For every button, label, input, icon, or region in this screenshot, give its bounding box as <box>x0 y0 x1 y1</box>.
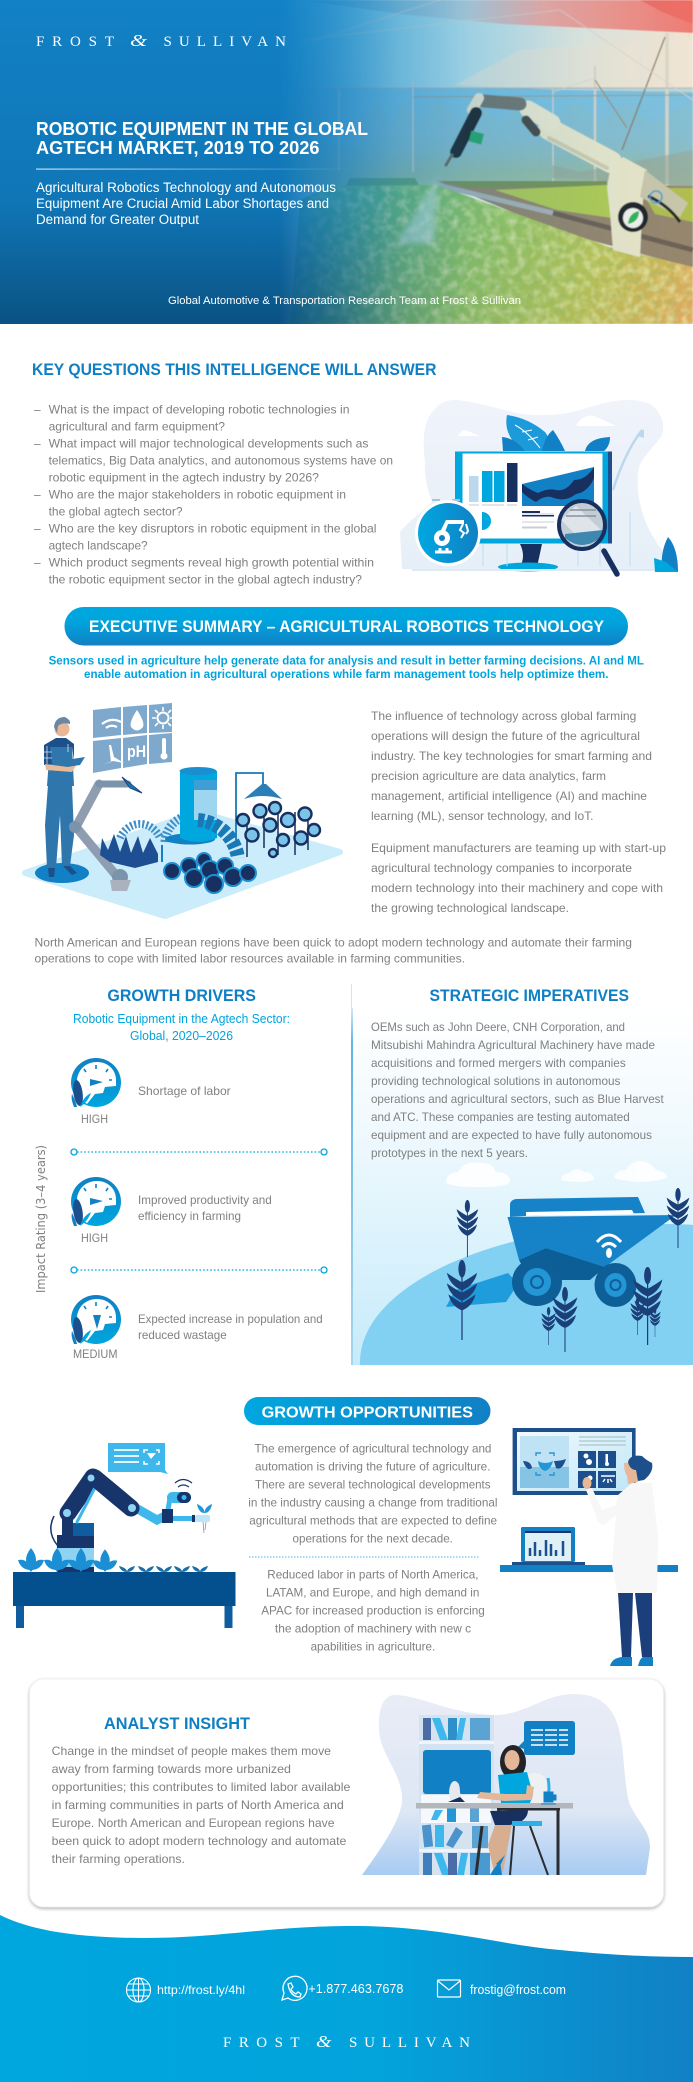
footer contact details <box>126 1976 566 2002</box>
driver: population and wastage: MEDIUM <box>73 1347 118 1361</box>
growth drivers subtitle: Global, 2020–2026 <box>130 1029 233 1043</box>
strategic imperatives body text: prototypes in the next 5 years. <box>371 1146 528 1160</box>
executive summary body text <box>371 709 666 915</box>
analyst insight body text: Change in the mindset of people makes them move <box>52 1744 331 1758</box>
regional adoption note: North American and European regions have been quick to adopt modern technology and automate their farming <box>34 936 632 950</box>
email <box>438 1980 566 1997</box>
question list <box>34 402 393 586</box>
hero banner <box>0 0 693 324</box>
Frost & Sullivan logo: FROST <box>36 34 114 50</box>
strategic imperatives body text: and ATC. These companies are testing automated <box>371 1110 630 1124</box>
farmer <box>35 717 89 883</box>
executive summary lead text: Sensors used in agriculture help generate data for analysis and result in better farming decisions. AI and ML <box>49 653 644 667</box>
opportunity paragraph two: apabilities in agriculture. <box>311 1640 435 1654</box>
harvester <box>446 1197 676 1307</box>
growth drivers subtitle <box>73 1012 290 1043</box>
question list: Who are the key disruptors in robotic equipment in the global <box>49 521 377 535</box>
growth drivers heading: GROWTH DRIVERS <box>107 987 256 1005</box>
driver: population and wastage <box>71 1295 323 1361</box>
opportunity paragraph two: Reduced labor in parts of North America, <box>267 1568 478 1582</box>
subtitle: Demand for Greater Output <box>36 212 199 227</box>
Frost & Sullivan logo: SULLIVAN <box>164 34 286 50</box>
panel: strategic imperatives <box>351 984 693 1365</box>
question list: telematics, Big Data analytics, and autonomous systems have on <box>49 453 393 467</box>
driver: shortage of labor: Shortage of labor <box>138 1084 231 1098</box>
opportunity paragraph one: agricultural methods that are expected to define <box>249 1514 497 1528</box>
sensor panels <box>93 703 174 773</box>
driver: improved productivity: HIGH <box>81 1231 108 1245</box>
footer Frost & Sullivan logo: FROST <box>223 2035 300 2051</box>
cabbages <box>164 853 256 893</box>
panel: growth opportunities <box>13 1397 678 1666</box>
executive summary body text: agricultural technology companies to incorporate <box>371 861 632 875</box>
executive summary body text: precision agriculture are data analytics, farm <box>371 769 606 783</box>
question list: robotic equipment in the agtech industry by 2026? <box>49 470 319 484</box>
opportunity paragraph one: operations for the next decade. <box>292 1532 453 1546</box>
executive summary body text: management, artificial intelligence (AI) and machine <box>371 789 647 803</box>
opportunity paragraph one <box>248 1442 498 1546</box>
opportunity paragraph two: LATAM, and Europe, and high demand in <box>266 1586 479 1600</box>
question list: the robotic equipment sector in the global agtech industry? <box>49 572 362 586</box>
analyst insight body text: Europe. North American and European regions have <box>52 1816 335 1830</box>
footer wave <box>0 1915 693 2082</box>
title <box>36 122 368 157</box>
illustration: robot arm tending plants on a table <box>13 1443 236 1628</box>
strategic imperatives body text <box>371 1020 664 1160</box>
footer Frost & Sullivan logo: & <box>316 2032 332 2051</box>
driver: improved productivity: Improved productivity and <box>138 1193 272 1207</box>
divider <box>71 1267 327 1273</box>
analyst insight heading: ANALYST INSIGHT <box>104 1715 250 1733</box>
subtitle <box>36 180 336 227</box>
opportunity paragraph one: The emergence of agricultural technology and <box>254 1442 491 1456</box>
illustration: autonomous harvester among wheat <box>360 1161 693 1365</box>
driver: population and wastage: reduced wastage <box>138 1328 227 1342</box>
hero blue overlay <box>0 0 693 324</box>
analyst insight body text: been quick to adopt modern technology and automate <box>52 1834 347 1848</box>
executive summary body text: the growing technological landscape. <box>371 901 569 915</box>
executive summary body text: operations will design the future of the agricultural <box>371 729 640 743</box>
driver: improved productivity: efficiency in farming <box>138 1209 241 1223</box>
question list: Which product segments reveal high growth potential within <box>49 555 374 569</box>
crop rows and sprinkler arcs <box>100 815 205 868</box>
question list: What impact will major technological developments such as <box>49 436 368 450</box>
phone: +1.877.463.7678 <box>308 1982 403 1996</box>
strategic imperatives body text: acquisitions and formed mergers with companies <box>371 1056 626 1070</box>
question list: agtech landscape? <box>49 538 148 552</box>
flowering plants <box>237 802 320 857</box>
executive summary body text: industry. The key technologies for smart farming and <box>371 749 652 763</box>
question list: – <box>34 402 41 416</box>
executive summary body text: The influence of technology across global farming <box>371 709 636 723</box>
executive summary banner <box>64 607 628 646</box>
footer Frost & Sullivan logo: SULLIVAN <box>349 2035 470 2051</box>
illustration: dashboard monitor with robot and magnifier <box>400 400 678 574</box>
opportunity paragraph one: There are several technological developments <box>255 1478 490 1492</box>
strategic imperatives body text: Mitsubishi Mahindra Agricultural Machinery have made <box>371 1038 655 1052</box>
question list: agricultural and farm equipment? <box>49 419 225 433</box>
hill <box>360 1224 693 1365</box>
computer monitor <box>423 1750 491 1794</box>
farm platform <box>25 812 340 916</box>
sensor panels: pH <box>127 742 146 761</box>
driver: shortage of labor: HIGH <box>81 1112 108 1126</box>
mug <box>541 1792 556 1804</box>
email: frostig@frost.com <box>470 1983 566 1997</box>
question list: Who are the major stakeholders in robotic equipment in <box>49 487 346 501</box>
analyst insight body text: opportunities; this contributes to limited labor available <box>52 1780 351 1794</box>
growth drivers subtitle: Robotic Equipment in the Agtech Sector: <box>73 1012 290 1026</box>
desk and laptop <box>500 1565 678 1572</box>
impact rating axis label: Impact Rating (3–4 years) <box>33 1145 48 1293</box>
illustration: analyst at desk with headset <box>362 1694 650 1875</box>
speech bubble <box>518 1721 575 1755</box>
analyst insight body text: in farming communities in parts of North America and <box>52 1798 344 1812</box>
executive summary banner: EXECUTIVE SUMMARY – AGRICULTURAL ROBOTICS TECHNOLOGY <box>89 617 605 636</box>
regional adoption note: operations to cope with limited labor resources available in farming communities. <box>34 952 465 966</box>
strategic imperatives body text: equipment and are expected to have fully autonomous <box>371 1128 652 1142</box>
potted plants <box>18 1548 117 1572</box>
question list: – <box>34 555 41 569</box>
leaves behind monitor <box>506 415 548 451</box>
title: AGTECH MARKET, 2019 TO 2026 <box>36 137 320 158</box>
analyst insight body text <box>52 1744 351 1866</box>
bookshelf <box>419 1715 494 1875</box>
question list: – <box>34 521 41 535</box>
opportunity paragraph two: APAC for increased production is enforcing <box>261 1604 485 1618</box>
strategic imperatives heading: STRATEGIC IMPERATIVES <box>430 987 629 1005</box>
question list: – <box>34 436 41 450</box>
opportunity paragraph two: the adoption of machinery with new c <box>275 1622 471 1636</box>
key questions heading: KEY QUESTIONS THIS INTELLIGENCE WILL ANSWER <box>32 361 437 379</box>
analyst <box>477 1745 549 1875</box>
water tank <box>165 767 238 858</box>
question list: the global agtech sector? <box>49 504 183 518</box>
shower sprayer <box>236 773 282 842</box>
executive summary body text: learning (ML), sensor technology, and IoT. <box>371 809 594 823</box>
divider <box>71 1149 327 1155</box>
question list: What is the impact of developing robotic technologies in <box>49 402 349 416</box>
robot arm <box>69 777 142 891</box>
subtitle: Equipment Are Crucial Amid Labor Shortages and <box>36 196 329 211</box>
driver: improved productivity <box>71 1177 272 1245</box>
phone <box>282 1976 403 2000</box>
question list: – <box>34 487 41 501</box>
subtitle: Agricultural Robotics Technology and Autonomous <box>36 180 336 195</box>
clouds <box>446 1161 667 1187</box>
wheat plants <box>447 1188 689 1352</box>
panel: growth drivers <box>33 987 327 1361</box>
strategic imperatives body text: OEMs such as John Deere, CNH Corporation, and <box>371 1020 625 1034</box>
growth opportunities banner: GROWTH OPPORTUNITIES <box>262 1405 473 1422</box>
panel: analyst insight <box>30 1679 664 1907</box>
illustration: scientist at monitoring screen <box>500 1428 678 1666</box>
opportunity paragraph two <box>261 1568 485 1654</box>
driver: population and wastage: Expected increase in population and <box>138 1312 323 1326</box>
opportunity paragraph one: automation is driving the future of agriculture. <box>255 1460 490 1474</box>
footer Frost & Sullivan logo <box>223 2032 470 2051</box>
regional adoption note <box>34 936 632 966</box>
research team credit: Global Automotive & Transportation Research Team at Frost & Sullivan <box>168 295 521 307</box>
website <box>126 1978 245 2002</box>
scientist <box>618 1593 652 1657</box>
strategic imperatives body text: operations and agricultural sectors, such as Blue Harvest <box>371 1092 664 1106</box>
executive summary lead text: enable automation in agricultural operations while farm management tools help optimize them. <box>84 667 608 681</box>
executive summary lead text <box>49 653 644 681</box>
website: http://frost.ly/4hl <box>157 1983 245 1997</box>
illustration: smart farm with farmer, sensors and robot arm <box>25 703 340 916</box>
title: ROBOTIC EQUIPMENT IN THE GLOBAL <box>36 118 368 139</box>
desk <box>416 1803 573 1875</box>
executive summary body text: Equipment manufacturers are teaming up with start-up <box>371 841 666 855</box>
executive summary body text: modern technology into their machinery and cope with <box>371 881 663 895</box>
analyst insight body text: their farming operations. <box>52 1852 185 1866</box>
driver: shortage of labor <box>71 1058 231 1126</box>
Frost & Sullivan logo <box>36 35 286 46</box>
growth opportunities banner <box>244 1397 490 1425</box>
key questions section <box>32 361 678 586</box>
strategic imperatives body text: providing technological solutions in autonomous <box>371 1074 620 1088</box>
hero photo: robotic arm spraying greenhouse crops <box>292 0 693 324</box>
Frost & Sullivan logo: & <box>130 31 148 50</box>
opportunity paragraph one: in the industry causing a change from traditional <box>248 1496 498 1510</box>
analyst insight body text: away from farming towards more urbanized <box>52 1762 291 1776</box>
